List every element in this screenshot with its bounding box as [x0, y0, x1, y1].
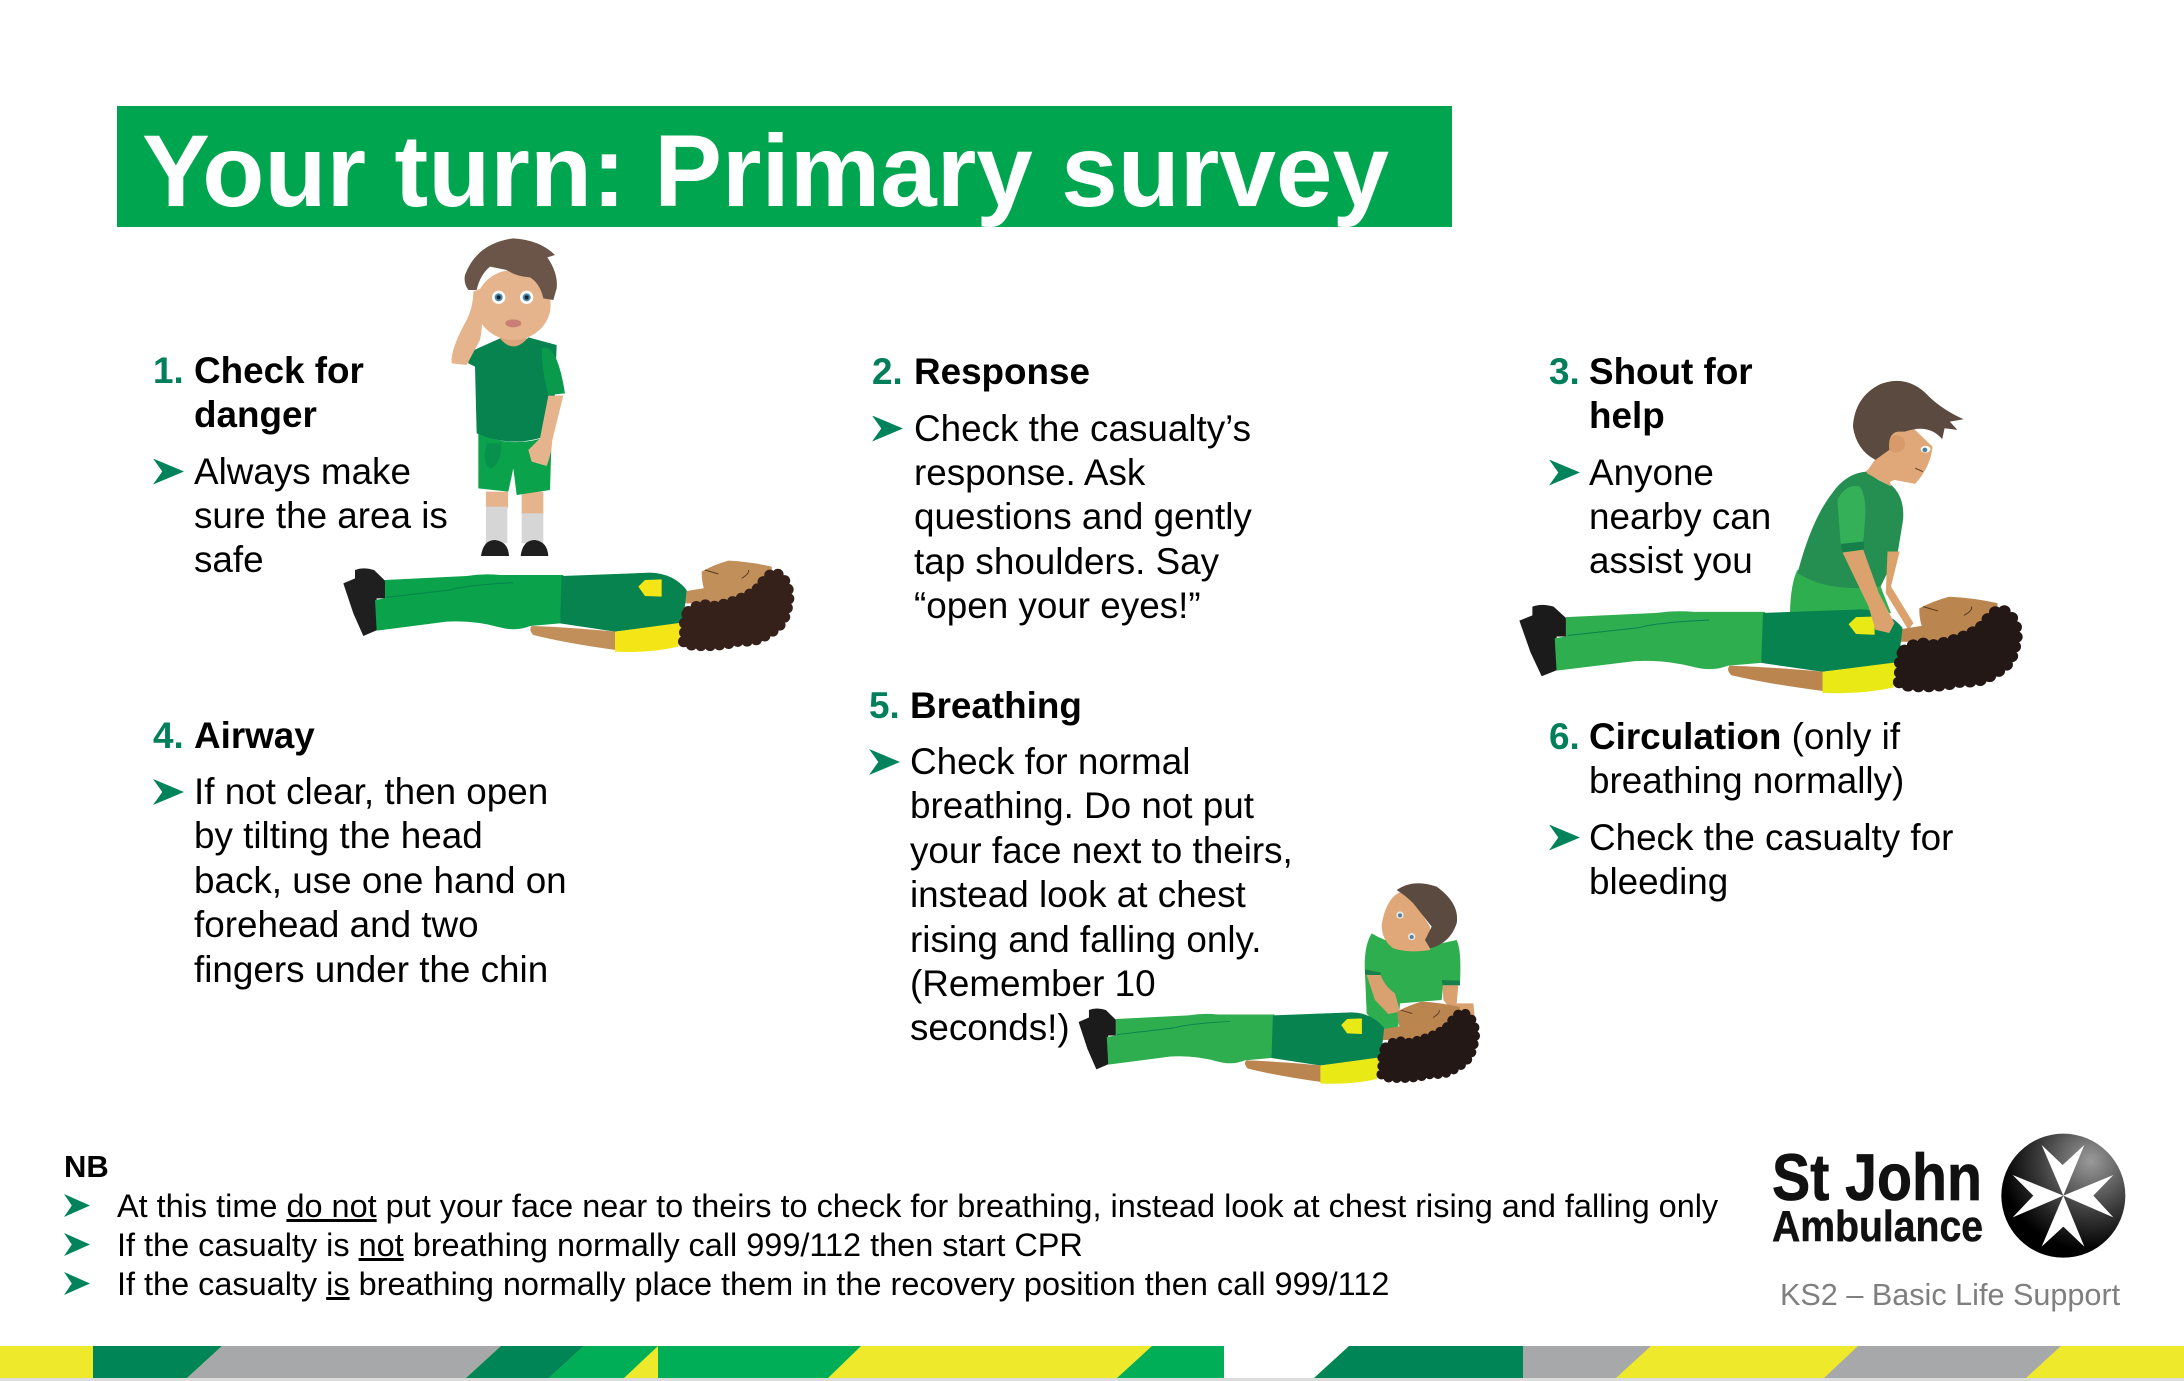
boy arm and hand	[1843, 550, 1894, 633]
boy crouching	[1365, 883, 1475, 1030]
panel: step 4 airway: If not clear, then open	[194, 771, 548, 812]
panel: step 6 circulation: bleeding	[1589, 861, 1728, 902]
panel: step 6 circulation: 6.	[1549, 716, 1580, 756]
panel: step 1 check for danger: Check for	[194, 350, 364, 390]
panel: step 6 circulation: Circulation (only if	[1589, 716, 1900, 756]
panel: step 3 shout for help: Anyone	[1589, 452, 1714, 492]
panel: step 5 breathing: (Remember 10	[910, 963, 1156, 1004]
panel: step 3 shout for help: nearby can	[1589, 496, 1771, 537]
panel: step 3 shout for help: help	[1589, 395, 1665, 436]
panel: step 5 breathing: rising and falling only.	[910, 919, 1261, 960]
logo: St John Ambulance	[1772, 1134, 2125, 1258]
panel: step 4 airway: forehead and two	[194, 904, 479, 945]
panel: step 1 check for danger: Always make	[194, 450, 411, 492]
panel: step 5 breathing: Breathing	[910, 685, 1082, 726]
panel: NB notes: NB	[64, 1149, 109, 1184]
panel: step 1 check for danger	[153, 350, 448, 580]
panel: step 1 check for danger: safe	[194, 539, 264, 580]
panel: step 3 shout for help: Shout for	[1589, 350, 1753, 392]
logo: St John Ambulance: St John	[1772, 1140, 1982, 1214]
panel: step 4 airway	[153, 715, 567, 990]
panel: step 6 circulation	[1549, 716, 1953, 902]
panel: step 6 circulation: breathing normally)	[1589, 760, 1904, 801]
panel: step 2 response: 2.	[872, 350, 903, 392]
panel: step 5 breathing: 5.	[869, 685, 900, 726]
panel: step 3 shout for help	[1549, 350, 1771, 581]
panel: step 6 circulation: Check the casualty for	[1589, 816, 1953, 858]
panel: step 5 breathing: your face next to theirs,	[910, 830, 1293, 871]
panel: step 3 shout for help: assist you	[1589, 540, 1753, 581]
panel: step 3 shout for help: 3.	[1549, 350, 1580, 392]
panel: step 4 airway: by tilting the head	[194, 815, 483, 856]
panel: step 2 response: Response	[914, 350, 1090, 392]
panel: step 1 check for danger: danger	[194, 394, 317, 435]
panel: NB notes: If the casualty is breathing normally place them in the recovery position then call 999/112	[117, 1266, 1389, 1302]
panel: step 5 breathing: breathing. Do not put	[910, 785, 1254, 826]
logo: St John Ambulance: Ambulance	[1772, 1202, 1983, 1251]
illustration: step 5, boy checks breathing with casualty	[1079, 883, 1475, 1084]
panel: step 5 breathing	[869, 685, 1293, 1048]
panel: step 4 airway: fingers under the chin	[194, 949, 548, 990]
boy standing	[452, 238, 565, 556]
panel: NB notes	[64, 1149, 1718, 1302]
panel: step 2 response: “open your eyes!”	[914, 585, 1201, 626]
panel: step 2 response: Check the casualty’s	[914, 408, 1251, 448]
panel: step 5 breathing: Check for normal	[910, 741, 1190, 782]
panel: step 2 response: questions and gently	[914, 496, 1252, 537]
panel: step 5 breathing: seconds!)	[910, 1007, 1070, 1048]
panel: NB notes: At this time do not put your face near to theirs to check for breathing, instead look at chest rising and falling only	[117, 1188, 1718, 1224]
panel: step 5 breathing: instead look at chest	[910, 874, 1246, 915]
illustration: step 3, boy shouting for help with casualty	[1519, 381, 2016, 693]
panel: step 2 response	[872, 350, 1252, 626]
title banner: Your turn: Primary survey	[142, 114, 1389, 227]
panel: step 4 airway: Airway	[194, 715, 315, 756]
boy lower body	[1790, 381, 1964, 630]
footer label: KS2 – Basic Life Support	[1780, 1278, 2120, 1312]
panel: step 4 airway: back, use one hand on	[194, 860, 567, 901]
bottom stripe band	[0, 1346, 2184, 1381]
panel: step 2 response: response. Ask	[914, 452, 1145, 493]
panel: step 1 check for danger: 1.	[153, 350, 184, 390]
illustration: step 1, boy checks for danger with casualty	[343, 238, 789, 652]
icon: Maltese cross badge	[2001, 1134, 2125, 1258]
panel: step 4 airway: 4.	[153, 715, 184, 756]
panel: step 1 check for danger: sure the area is	[194, 495, 448, 536]
panel: NB notes: If the casualty is not breathing normally call 999/112 then start CPR	[117, 1227, 1083, 1263]
panel: step 2 response: tap shoulders. Say	[914, 541, 1219, 582]
